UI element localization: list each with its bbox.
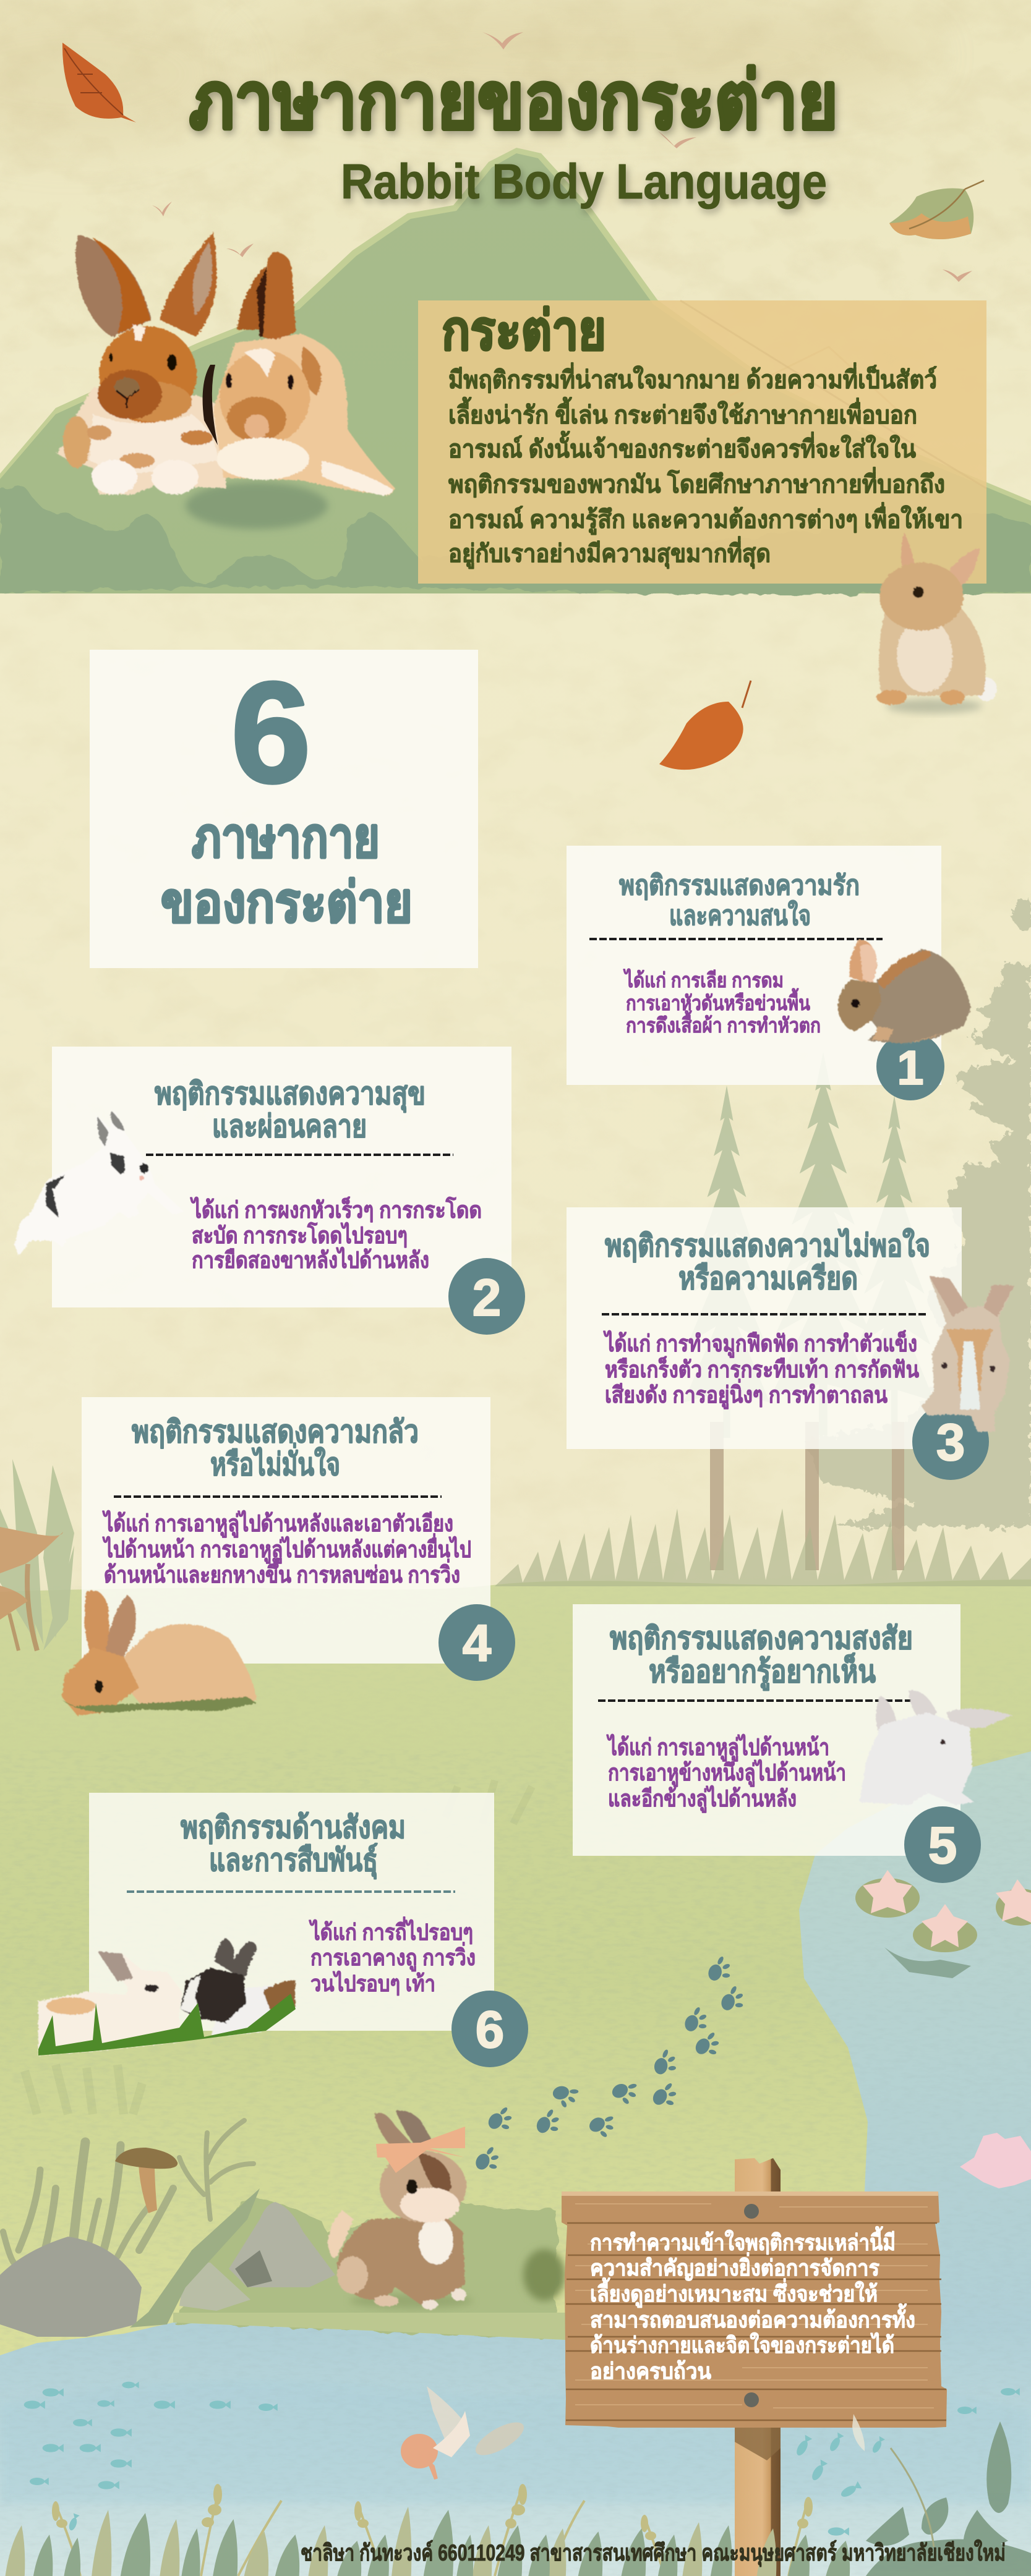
body 1 <box>623 968 821 1037</box>
body 4 <box>102 1510 471 1588</box>
intro body: อารมณ์ ดังนั้นเจ้าของกระต่ายจึงควรที่จะใส่ใจใน <box>448 431 916 463</box>
rabbit watercolor sitting <box>876 532 997 713</box>
body 2: ได้แก่ การผงกหัวเร็วๆ การกระโดด <box>190 1196 482 1223</box>
heading 4: หรือไม่มั่นใจ <box>210 1443 340 1482</box>
body 1: การดึงเสื้อผ้า การทำหัวตก <box>626 1010 821 1037</box>
rocks <box>0 2188 335 2337</box>
heading text: ของกระต่าย <box>161 872 413 934</box>
heading 6: และการสืบพันธุ์ <box>209 1843 378 1879</box>
badge 6: 6 <box>476 2000 504 2059</box>
badge 6 <box>451 1991 528 2067</box>
rabbit B <box>213 252 395 496</box>
leaf top right <box>889 181 984 239</box>
background pines and trees <box>683 899 1031 1570</box>
heading 5: หรืออยากรู้อยากเห็น <box>649 1652 876 1691</box>
rabbit 2 jumping <box>14 1110 184 1256</box>
body 4: ด้านหน้าและยกหางขึ้น การหลบซ่อน การวิ่ง <box>104 1558 460 1588</box>
body 6: การเอาคางถู การวิ่ง <box>310 1942 476 1972</box>
rabbits 6 pair <box>38 1938 296 2055</box>
heading text: ภาษากาย <box>192 807 380 869</box>
badge 5: 5 <box>928 1816 957 1874</box>
panel 2: happiness and relaxation <box>14 1047 525 1335</box>
koi fish <box>401 2386 529 2479</box>
sign text: อย่างครบถ้วน <box>590 2358 711 2384</box>
body 5: และอีกข้างลู่ไปด้านหลัง <box>608 1785 797 1813</box>
grass blades <box>4 2507 776 2576</box>
body 2: การยืดสองขาหลังไปด้านหลัง <box>192 1246 429 1273</box>
heading 1 <box>619 870 860 931</box>
body 3 <box>603 1329 919 1409</box>
big number 6: 6 <box>231 653 311 813</box>
heading 1: พฤติกรรมแสดงความรัก <box>619 870 860 901</box>
body 6: ได้แก่ การถี่ไปรอบๆ <box>309 1916 473 1945</box>
foreground grass <box>4 2414 1031 2576</box>
heading text <box>161 807 413 934</box>
body 1: การเอาหัวดันหรือข่วนพื้น <box>626 988 810 1014</box>
heading 2: และผ่อนคลาย <box>212 1109 367 1144</box>
bird flock decoration <box>152 32 972 282</box>
screws <box>744 2204 759 2219</box>
right leafy plant <box>866 2421 1031 2576</box>
panel 3: displeasure or stress <box>567 1207 1014 1480</box>
heading 3: พฤติกรรมแสดงความไม่พอใจ <box>605 1228 930 1263</box>
mountain <box>0 148 1031 595</box>
heading 2 <box>155 1076 426 1144</box>
body 1: ได้แก่ การเลีย การดม <box>623 968 784 992</box>
body 2 <box>190 1196 482 1273</box>
panel 5: curiosity <box>573 1604 1012 1883</box>
body 6 <box>309 1916 476 1996</box>
title: ภาษากายของกระต่าย <box>189 57 838 145</box>
footprints <box>473 1953 748 2175</box>
left plant and mushrooms <box>0 1459 74 1651</box>
heading 3: หรือความเครียด <box>678 1261 858 1296</box>
mushroom <box>115 2148 178 2213</box>
body 5: การเอาหูข้างหนึ่งลู่ไปด้านหน้า <box>608 1756 846 1787</box>
lotus flower <box>960 2133 1031 2188</box>
body 4: ได้แก่ การเอาหูลู่ไปด้านหลังและเอาตัวเอียง <box>102 1510 453 1538</box>
rabbit 1 brown <box>838 940 971 1045</box>
badge 5 <box>904 1806 981 1883</box>
intro body: เลี้ยงน่ารัก ขี้เล่น กระต่ายจึงใช้ภาษากายเพื่อบอก <box>448 397 917 429</box>
rabbit 3 flattened <box>922 1277 1014 1432</box>
lily pads <box>855 1870 1031 1978</box>
badge 2 <box>448 1258 525 1335</box>
heading 6 <box>181 1810 406 1879</box>
body 3: เสียงดัง การอยู่นิ่งๆ การทำตาถลน <box>605 1379 888 1409</box>
panel 1: love and interest <box>567 846 971 1100</box>
leaf top left <box>62 43 136 122</box>
subtitle: Rabbit Body Language <box>341 154 827 209</box>
fish school <box>24 2382 1020 2536</box>
panel: six body languages heading <box>90 650 478 968</box>
badge 4 <box>438 1604 515 1681</box>
bunny with bow <box>328 2111 473 2310</box>
body 3: หรือเกร็งตัว การกระทืบเท้า การกัดฟัน <box>605 1355 919 1382</box>
heading 3 <box>605 1228 930 1296</box>
heading 6: พฤติกรรมด้านสังคม <box>181 1810 406 1845</box>
heading 2: พฤติกรรมแสดงความสุข <box>155 1076 426 1113</box>
badge 3 <box>912 1403 989 1480</box>
wheat sprigs <box>56 2486 808 2576</box>
rabbit 5 white <box>860 1690 1012 1805</box>
body 6: วนไปรอบๆ เท้า <box>310 1970 435 1996</box>
river <box>0 1749 1031 2576</box>
badge 4: 4 <box>463 1614 492 1672</box>
sign text: ด้านร่างกายและจิตใจของกระต่ายได้ <box>590 2332 894 2358</box>
sign text <box>590 2226 915 2384</box>
heading 5 <box>610 1621 913 1691</box>
intro body <box>448 362 963 569</box>
body 5 <box>606 1733 846 1813</box>
heading 5: พฤติกรรมแสดงความสงสัย <box>610 1621 913 1656</box>
green field <box>0 1508 1031 2576</box>
sign text: เลี้ยงดูอย่างเหมาะสม ซึ่งจะช่วยให้ <box>590 2277 878 2308</box>
leaf falling <box>659 681 751 770</box>
heading 4: พฤติกรรมแสดงความกลัว <box>132 1414 419 1449</box>
rabbit 4 grazing <box>62 1591 257 1715</box>
body 5: ได้แก่ การเอาหูลู่ไปด้านหน้า <box>606 1733 829 1762</box>
intro heading: กระต่าย <box>442 300 606 361</box>
panel 6: social and reproduction <box>38 1793 528 2067</box>
sign <box>562 2158 947 2576</box>
body 3: ได้แก่ การทำจมูกฟืดฟัด การทำตัวแข็ง <box>603 1329 917 1358</box>
body 2: สะบัด การกระโดดไปรอบๆ <box>192 1222 408 1248</box>
sign text: สามารถตอบสนองต่อความต้องการทั้ง <box>590 2303 915 2332</box>
rabbit A <box>56 232 226 495</box>
badge 1: 1 <box>897 1040 924 1095</box>
badge 2: 2 <box>473 1269 501 1327</box>
intro body: มีพฤติกรรมที่น่าสนใจมากมาย ด้วยความที่เป็นสัตว์ <box>448 362 937 394</box>
sign text: การทำความเข้าใจพฤติกรรมเหล่านี้มี <box>590 2226 896 2255</box>
panel: intro <box>418 300 986 584</box>
intro body: พฤติกรรมของพวกมัน โดยศึกษาภาษากายที่บอกถึง <box>448 467 945 498</box>
heading 4 <box>132 1414 419 1482</box>
hill, rocks and plants bottom-left <box>0 2120 565 2340</box>
body 4: ไปด้านหน้า การเอาหูลู่ไปด้านหลังแต่คางยื่นไป <box>102 1533 471 1564</box>
rabbit pair photo <box>56 232 395 529</box>
intro body: อยู่กับเราอย่างมีความสุขมากที่สุด <box>448 536 771 569</box>
panel 4: fear or insecurity <box>62 1397 515 1715</box>
intro body: อารมณ์ ความรู้สึก และความต้องการต่างๆ เพื่อให้เขา <box>448 502 963 535</box>
heading 1: และความสนใจ <box>669 899 811 931</box>
badge 3: 3 <box>936 1413 965 1471</box>
badge 1 <box>876 1032 944 1100</box>
sign text: ความสำคัญอย่างยิ่งต่อการจัดการ <box>590 2252 880 2281</box>
grass row <box>495 1508 1031 1586</box>
